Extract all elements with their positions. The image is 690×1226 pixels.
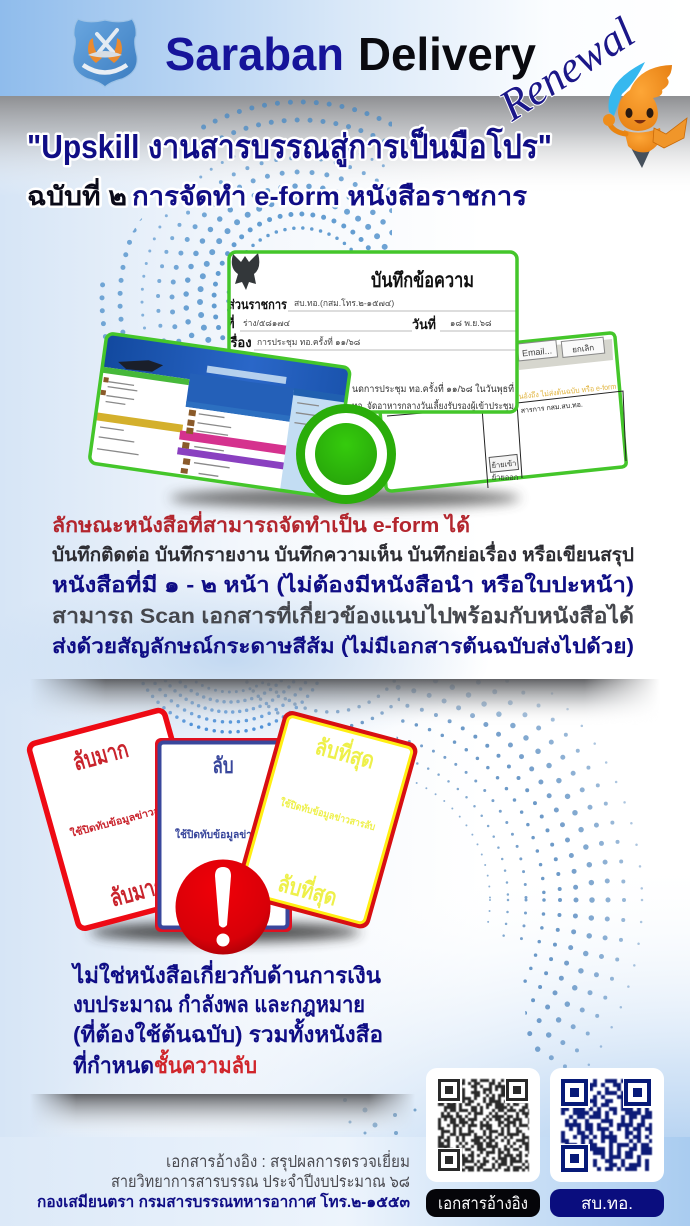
button: back [489,454,519,472]
panel: secret level top-secret yellow card: ลับที่สุด [275,866,341,912]
footer reference text: เอกสารอ้างอิง : สรุปผลการตรวจเยี่ยม [166,1150,410,1172]
field: reference and date: ที่ [226,314,235,331]
panel: left web portal card [89,333,350,498]
renewal script label: Renewal [490,8,643,131]
field: reference and date: ร่าง/๕๘๑๗๔ [243,318,291,328]
text block: exclusions: ไม่ใช่หนังสือเกี่ยวกับด้านการเงิน [71,959,381,988]
button: cancel: ยกเลิก [572,343,595,354]
footer reference text: สายวิทยาการสารบรรณ ประจำปีงบประมาณ ๖๘ [111,1173,410,1191]
footer gradient strip [0,1137,690,1226]
memo body: นดการประชุม ทอ.ครั้งที่ ๑๑/๖๘ ในวันพุธที่ [352,382,514,395]
portal header [104,336,348,396]
text block: exclusions: งบประมาณ กำลังพล และกฎหมาย [73,992,365,1017]
memo body: ทอ. จัดอาหารกลางวันเลี้ยงรับรองผู้เข้าประชุม [352,399,514,412]
panel: secret level top-secret yellow card [236,712,416,927]
label: saraban office [550,1189,664,1217]
memo heading: บันทึกข้อความ [371,269,474,292]
button: email [517,340,558,361]
text block: e-form criteria: ส่งด้วยสัญลักษณ์กระดาษสีส้ม (ไม่มีเอกสารต้นฉบับส่งไปด้วย) [52,634,634,658]
text block: exclusions [71,959,383,1078]
button: email: Email... [522,345,552,359]
field: department: สบ.ทอ.(กสม.โทร.๒-๑๕๗๔) [294,298,394,308]
decorative dots: dense cluster behind cards [142,680,400,734]
subheading: ฉบับที่ ๒ [27,177,127,211]
footer reference text: กองเสมียนตรา กรมสารบรรณทหารอากาศ โทร.๒-๑๕๕๓ [37,1192,410,1211]
QR code: saraban office [550,1068,664,1182]
title: Delivery [358,28,536,80]
finder marks [560,1078,653,1174]
panel: secret level top-secret yellow card: ลับที่สุด [312,729,379,775]
panel: secret level top-secret yellow card: ใช้ปิดทับข้อมูลข่าวสารลับ [278,796,377,834]
text block: exclusions: (ที่ต้องใช้ต้นฉบับ) รวมทั้งหนังสือ [73,1018,383,1047]
icon: green correct circle [296,404,396,504]
shadow beneath classification cards [90,922,360,942]
footer reference text [37,1150,410,1211]
finder marks [437,1078,530,1173]
text block: exclusions: ที่กำหนด [73,1049,154,1078]
panel: right document card [376,333,626,491]
field: department [230,298,516,312]
label: reference document [426,1189,540,1217]
memo body [352,382,514,412]
panel: secret level most-secret red card: ใช้ปิดทับข้อมูลข่าวสาร [69,800,174,841]
field: reference and date [226,314,517,332]
label: saraban office: สบ.ทอ. [581,1194,633,1213]
field: department: ส่วนราชการ [228,297,287,312]
button: back: ย้ายเข้า [491,459,517,470]
panel: secret level most-secret red card: ลับมาก [107,873,169,912]
icon: garuda emblem [232,253,259,290]
panel: secret level secret blue card [155,738,292,932]
field: subject: การประชุม ทอ.ครั้งที่ ๑๑/๖๘ [257,336,361,348]
text block: e-form criteria [52,510,634,658]
shadow band under text block [30,679,660,725]
heading: upskill: "Upskill งานสารบรรณสู่การเป็นมือโปร" [27,126,552,168]
shadow band above footer [30,1094,415,1136]
field: reference and date: ๑๘ พ.ย.๖๘ [450,318,492,328]
title: Saraban [165,28,344,80]
text block: e-form criteria: หนังสือที่มี ๑ - ๒ หน้า (ไม่ต้องมีหนังสือนำ หรือใบปะหน้า) [52,569,634,597]
logo: air force shield [73,19,137,87]
subheading [27,177,527,211]
text block: exclusions: ชั้นความลับ [154,1049,257,1078]
icon: red exclamation circle [176,860,270,954]
panel: memo document card [226,252,517,412]
text block: e-form criteria: บันทึกติดต่อ บันทึกรายงาน บันทึกความเห็น บันทึกย่อเรื่อง หรือเขียนสรุป [52,541,634,567]
decorative dots: upper radial pattern [100,100,392,343]
field: subject: เรื่อง [226,333,252,350]
form note: นอังถึง ไม่ส่งต้นฉบับ หรือ e-form [518,382,617,401]
decorative dots: near footer [343,1098,416,1135]
decorative dots: lower radial pattern [396,680,644,1068]
field: reference and date: วันที่ [412,315,436,332]
field: subject [226,333,517,350]
title [165,28,536,80]
text block: e-form criteria: สามารถ Scan เอกสารที่เกี่ยวข้องแนบไปพร้อมกับหนังสือได้ [52,600,634,628]
panel: secret level secret blue card: ใช้ปิดทับข้อมูลข่าวสาร [175,827,275,842]
QR code: reference document [426,1068,540,1182]
shadow beneath document cards [170,488,520,508]
button: remove: ย้ายออก [492,473,518,482]
button: cancel [561,337,605,357]
form recipient: สารการ กสม.สบ.ทอ. [520,402,583,415]
text block: e-form criteria: ลักษณะหนังสือที่สามารถจัดทำเป็น e-form ได้ [52,510,470,537]
panel: secret level most-secret red card [28,709,215,930]
panel: secret level most-secret red card: ลับมาก [70,737,131,776]
label: reference document: เอกสารอ้างอิง [438,1194,528,1213]
panel: secret level secret blue card: ลับ [212,753,234,778]
subheading: การจัดทำ e-form หนังสือราชการ [132,181,527,211]
mascot: orange quill character [603,62,687,168]
